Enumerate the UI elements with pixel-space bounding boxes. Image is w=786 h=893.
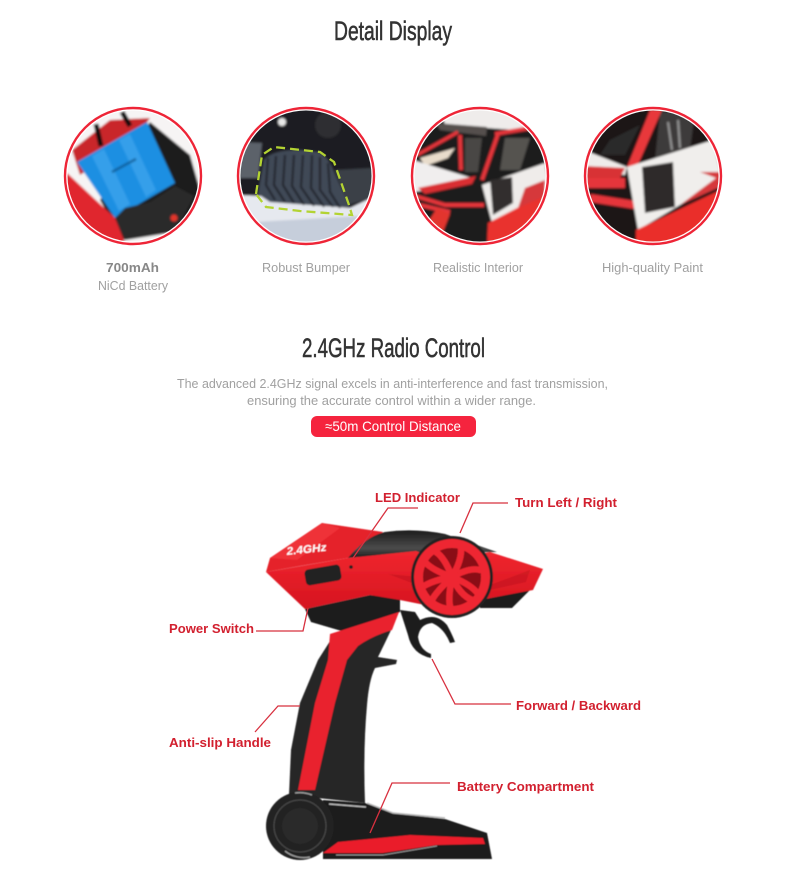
title: Detail Display: Detail Display — [334, 16, 452, 46]
handle red stripe — [298, 612, 399, 790]
panel: realistic interior — [411, 107, 549, 275]
illustration: radio controller — [266, 523, 543, 860]
photo: interior — [411, 107, 549, 245]
panel: 700mAh NiCd battery — [64, 107, 202, 293]
description text — [177, 376, 608, 408]
2.4GHz mark: 2.4GHz — [285, 542, 328, 558]
ring — [412, 108, 548, 244]
infographic page — [64, 20, 722, 861]
ring — [585, 108, 721, 244]
right black underside — [480, 590, 530, 608]
callout: LED Indicator: LED Indicator — [375, 490, 460, 505]
wheel: battery end dial — [266, 792, 334, 860]
callout: Battery Compartment — [370, 779, 595, 833]
callout: LED Indicator — [353, 490, 460, 558]
power switch — [304, 564, 342, 586]
badge: control distance — [311, 416, 476, 437]
callout: Anti-slip Handle: Anti-slip Handle — [169, 735, 271, 750]
base silver edge — [329, 803, 445, 818]
base red stripe — [323, 835, 485, 853]
callout: Turn Left / Right: Turn Left / Right — [515, 495, 618, 510]
photo: bumper — [237, 107, 375, 245]
callout: Forward / Backward — [432, 659, 641, 713]
panel: 700mAh NiCd battery: NiCd Battery — [98, 278, 168, 293]
description text: The advanced 2.4GHz signal excels in anti-interference and fast transmission, — [177, 376, 608, 391]
photo: paint — [584, 107, 722, 245]
base — [323, 800, 492, 859]
description text: ensuring the accurate control within a wider range. — [247, 393, 536, 408]
photo: battery — [64, 107, 202, 245]
heading: 2.4GHz Radio Control: 2.4GHz Radio Control — [302, 333, 485, 363]
panel: robust bumper — [237, 107, 375, 275]
caption: Robust Bumper — [262, 260, 351, 275]
top shell — [266, 523, 383, 572]
black under-body — [305, 595, 400, 632]
bumper outline — [256, 147, 352, 215]
caption: 700mAh — [106, 260, 159, 275]
ring — [65, 108, 201, 244]
caption: High-quality Paint — [602, 260, 703, 275]
ring — [238, 108, 374, 244]
callout: Forward / Backward: Forward / Backward — [516, 698, 641, 713]
panel: high-quality paint — [584, 107, 722, 275]
trigger — [400, 610, 455, 658]
callout: Power Switch — [169, 608, 308, 636]
callout: Battery Compartment: Battery Compartment — [457, 779, 595, 794]
canopy — [348, 530, 497, 558]
main red body — [266, 551, 543, 609]
callout: Turn Left / Right — [460, 495, 618, 533]
caption: Realistic Interior — [433, 260, 524, 275]
callout: Anti-slip Handle — [169, 706, 300, 750]
body shadow panel — [388, 570, 530, 592]
handle back — [289, 628, 397, 803]
LED dot — [349, 565, 353, 569]
callout: Power Switch: Power Switch — [169, 621, 254, 636]
steering wheel — [411, 536, 493, 618]
badge: control distance: ≈50m Control Distance — [325, 418, 461, 434]
